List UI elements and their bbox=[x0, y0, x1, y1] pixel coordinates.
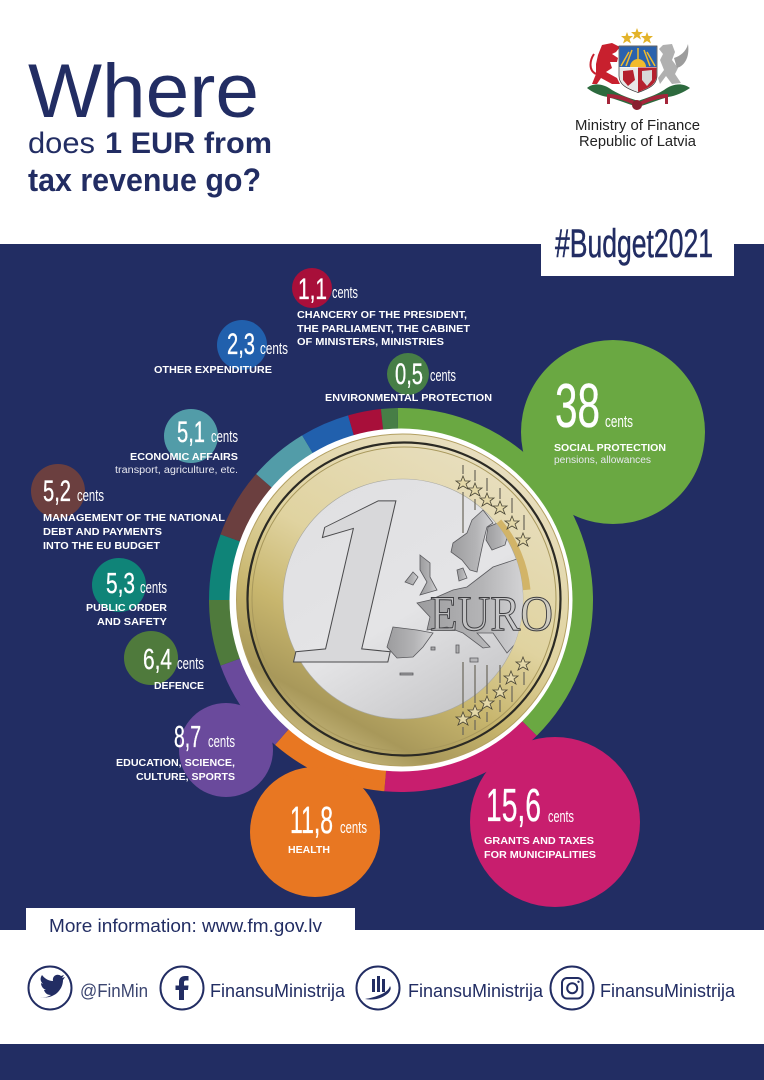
title: does bbox=[28, 127, 95, 160]
coin vertical lines bbox=[463, 465, 524, 735]
bubble: health: 11,8 bbox=[290, 800, 333, 842]
bubble: social protection bbox=[521, 340, 705, 524]
ministry name: Ministry of Finance bbox=[575, 118, 700, 134]
bubble: social protection: 38 bbox=[555, 372, 600, 441]
bubble: health: HEALTH bbox=[288, 844, 330, 856]
title: Where bbox=[28, 49, 259, 134]
bubble: environmental protection: cents bbox=[430, 366, 456, 385]
bubble: debt management: cents bbox=[77, 486, 104, 505]
more information tab bbox=[26, 908, 355, 938]
bubble: defence: 6,4 bbox=[143, 644, 172, 676]
bubble: environmental protection bbox=[325, 353, 492, 404]
social: instagram: FinansuMinistrija bbox=[600, 981, 736, 1001]
social: facebook bbox=[160, 966, 346, 1010]
bubble: chancery, parliament, cabinet: OF MINISTERS, MINISTRIES bbox=[297, 336, 444, 348]
title: 1 EUR from bbox=[105, 127, 272, 160]
bubble: social protection: SOCIAL PROTECTION bbox=[554, 442, 666, 454]
bubble: chancery, parliament, cabinet bbox=[292, 268, 471, 348]
bubble: other expenditure: 2,3 bbox=[227, 328, 255, 361]
coin map of Europe bbox=[387, 510, 525, 675]
bubble: grants and taxes for municipalities: 15,6 bbox=[486, 779, 541, 831]
navy panel bbox=[0, 244, 764, 930]
bubble: environmental protection: 0,5 bbox=[395, 358, 423, 391]
bubble: defence: DEFENCE bbox=[154, 680, 204, 692]
bubble: social protection: cents bbox=[605, 412, 633, 431]
bubble: environmental protection: ENVIRONMENTAL PROTECTION bbox=[325, 392, 492, 404]
bubble: other expenditure bbox=[154, 320, 288, 376]
bubble: education, science, culture, sports: CULTURE, SPORTS bbox=[136, 771, 235, 783]
bubble: chancery, parliament, cabinet: THE PARLIAMENT, THE CABINET bbox=[297, 323, 471, 335]
logo: coat of arms of Latvia bbox=[587, 28, 690, 110]
bubble: education, science, culture, sports: cents bbox=[208, 732, 235, 751]
bubble: defence bbox=[124, 631, 204, 692]
bubble: chancery, parliament, cabinet: CHANCERY OF THE PRESIDENT, bbox=[297, 309, 467, 321]
bubble: chancery, parliament, cabinet: 1,1 bbox=[298, 273, 327, 306]
bubble: public order and safety: PUBLIC ORDER bbox=[86, 602, 167, 614]
bubble: grants and taxes for municipalities: FOR MUNICIPALITIES bbox=[484, 849, 596, 861]
bubble: education, science, culture, sports bbox=[116, 703, 273, 797]
bubble: debt management: DEBT AND PAYMENTS bbox=[43, 526, 162, 538]
social: facebook: FinansuMinistrija bbox=[210, 981, 346, 1001]
bubble: other expenditure: OTHER EXPENDITURE bbox=[154, 364, 272, 376]
hashtag tab bbox=[541, 222, 734, 276]
ring chart bbox=[217, 416, 585, 784]
bubble: debt management: 5,2 bbox=[43, 475, 71, 508]
bubble: defence: cents bbox=[177, 654, 204, 673]
ministry name: Republic of Latvia bbox=[579, 134, 697, 150]
bubble: social protection: pensions, allowances bbox=[554, 455, 651, 466]
bubble: education, science, culture, sports: 8,7 bbox=[174, 719, 201, 754]
bubble: health bbox=[250, 767, 380, 897]
bubble: grants and taxes for municipalities bbox=[470, 737, 640, 907]
bubble: public order and safety: AND SAFETY bbox=[97, 616, 167, 628]
bubble: public order and safety: cents bbox=[140, 578, 167, 597]
bubble: education, science, culture, sports: EDUCATION, SCIENCE, bbox=[116, 757, 235, 769]
bubble: debt management bbox=[31, 464, 226, 552]
coin numeral: 1 bbox=[261, 444, 451, 715]
footer band bbox=[0, 1044, 764, 1080]
bubble: public order and safety: 5,3 bbox=[106, 568, 135, 600]
bubble: economic affairs bbox=[115, 409, 238, 476]
bubble: economic affairs: ECONOMIC AFFAIRS bbox=[130, 451, 238, 463]
bubble: debt management: MANAGEMENT OF THE NATIONAL bbox=[43, 512, 226, 524]
bubble: other expenditure: cents bbox=[260, 339, 288, 358]
coin stars bbox=[456, 476, 530, 725]
bubble: chancery, parliament, cabinet: cents bbox=[332, 283, 358, 302]
bubble: grants and taxes for municipalities: GRANTS AND TAXES bbox=[484, 835, 594, 847]
bubble: debt management: INTO THE EU BUDGET bbox=[43, 540, 161, 552]
social: draugiem: FinansuMinistrija bbox=[408, 981, 544, 1001]
title bbox=[28, 49, 272, 198]
bubble: economic affairs: 5,1 bbox=[177, 416, 205, 449]
ministry name bbox=[575, 118, 700, 150]
social: twitter bbox=[28, 966, 148, 1010]
bubble: health: cents bbox=[340, 818, 367, 837]
bubble: economic affairs: cents bbox=[211, 427, 238, 446]
social: draugiem bbox=[356, 966, 544, 1010]
title: tax revenue go? bbox=[28, 162, 261, 198]
bubble: economic affairs: transport, agriculture, etc. bbox=[115, 465, 238, 476]
social: twitter: @FinMin bbox=[80, 981, 148, 1001]
1 euro coin bbox=[230, 428, 572, 772]
more information tab: More information: www.fm.gov.lv bbox=[49, 916, 322, 936]
bubble: public order and safety bbox=[86, 558, 167, 628]
bubble: grants and taxes for municipalities: cents bbox=[548, 807, 574, 826]
coin EURO lettering: EURO bbox=[430, 585, 553, 641]
social: instagram bbox=[550, 966, 736, 1010]
